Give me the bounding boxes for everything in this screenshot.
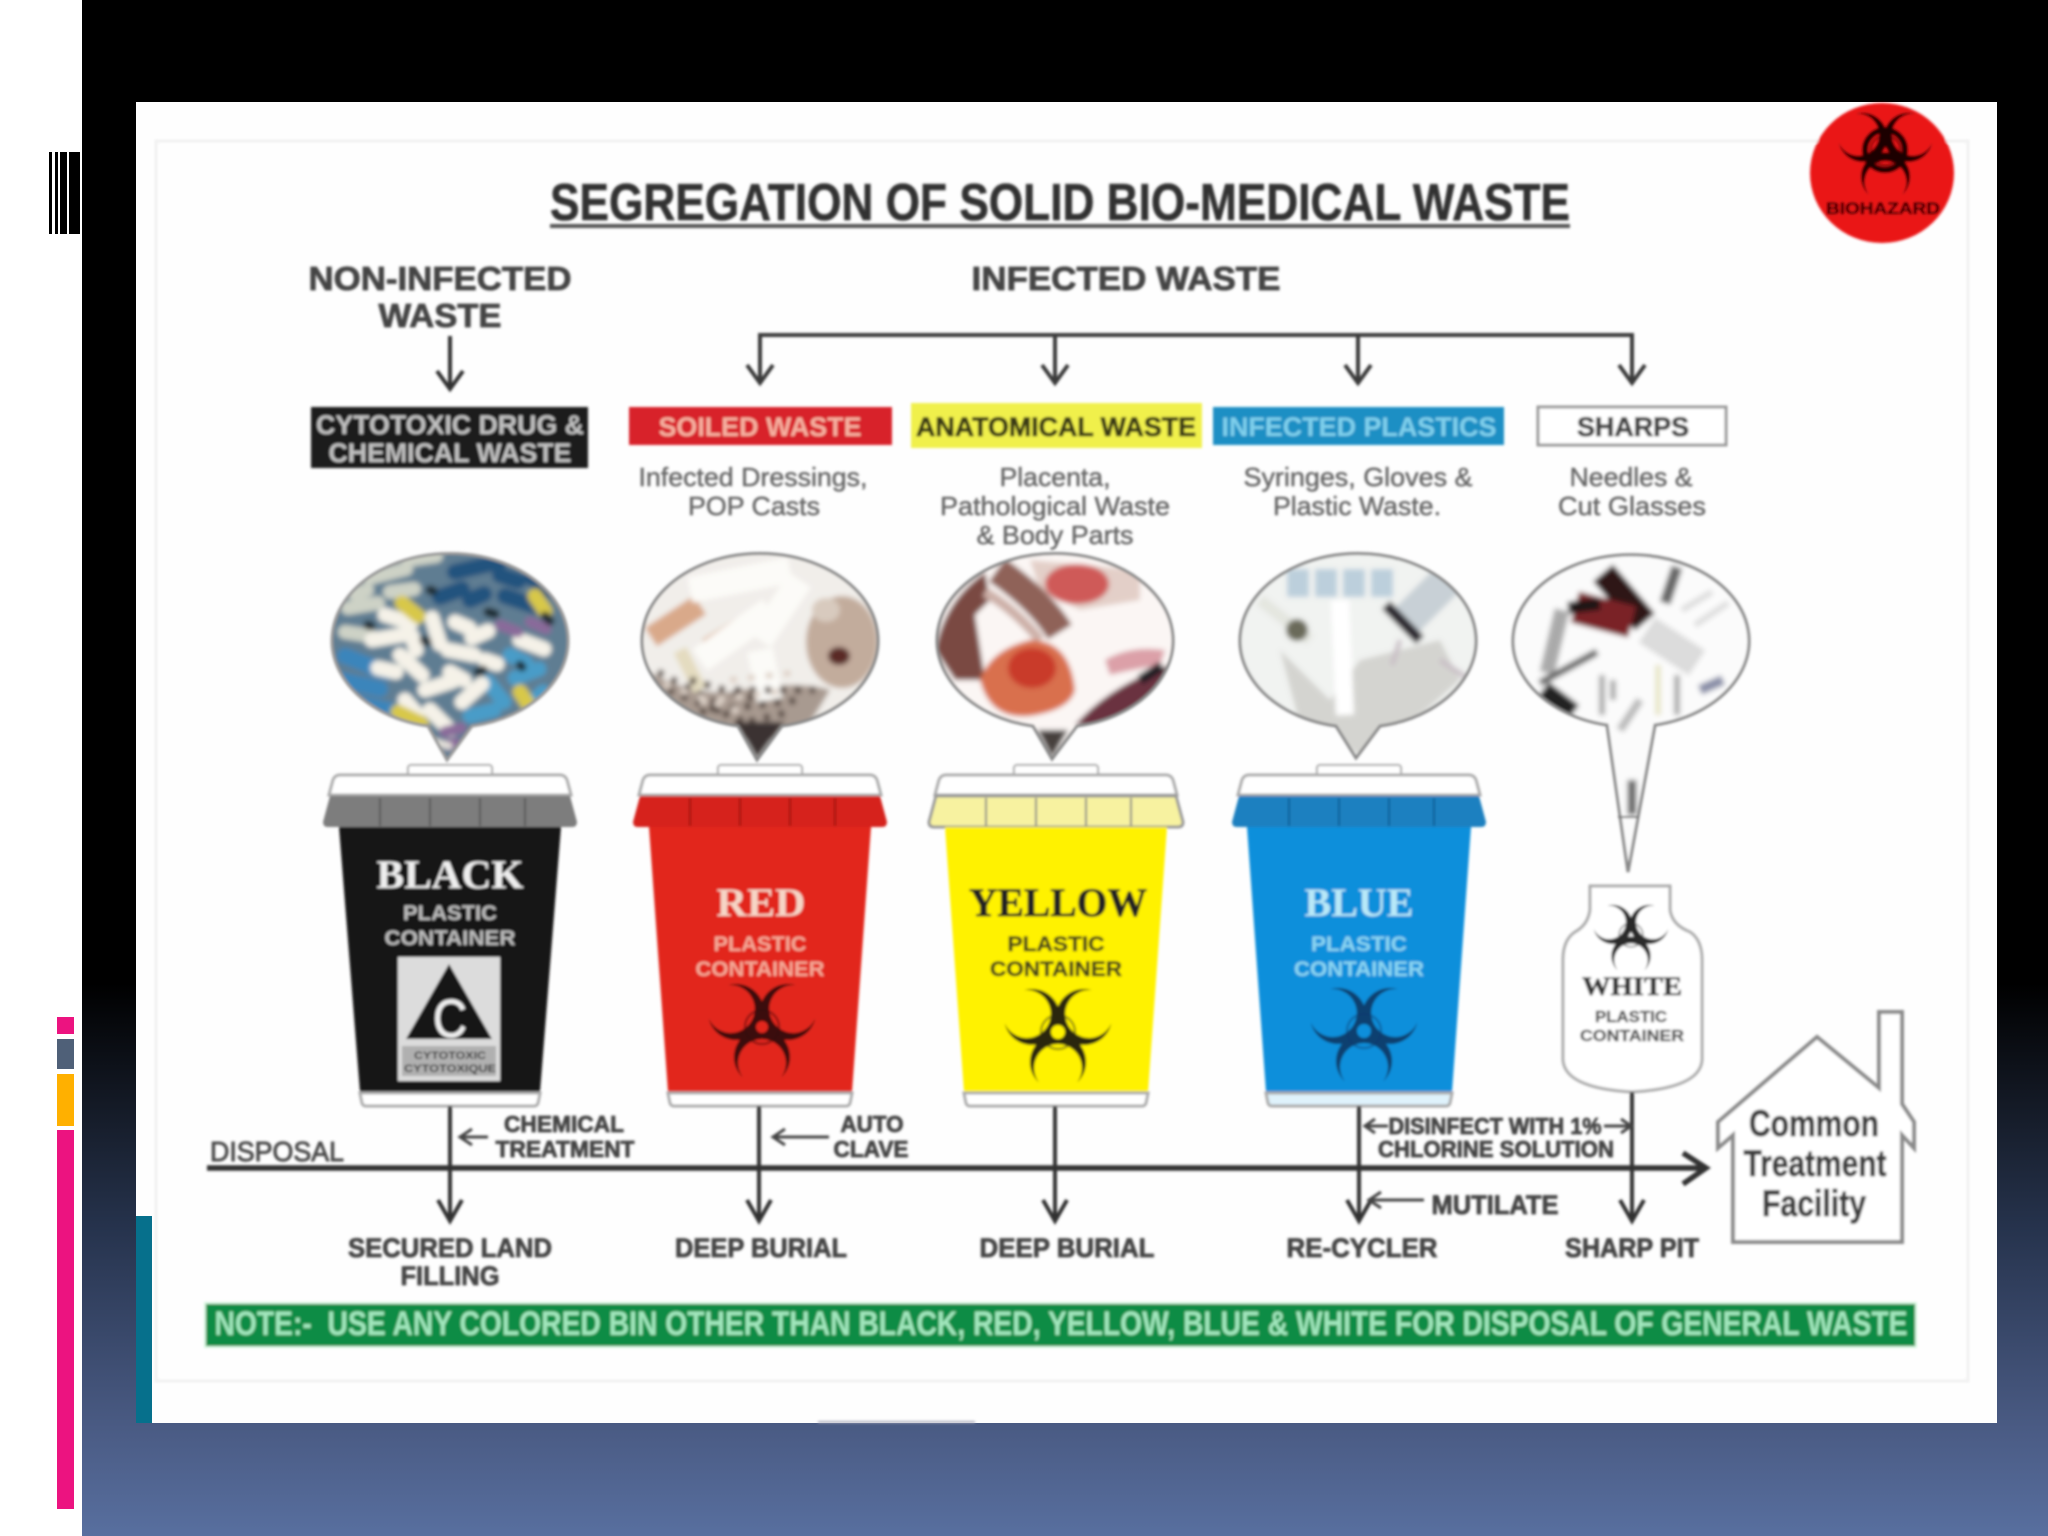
infographic contents xyxy=(156,103,1968,1423)
note: mutilate: MUTILATE xyxy=(1432,1190,1558,1220)
outcome: secured land filling: SECURED LAND xyxy=(348,1233,552,1263)
infographic card xyxy=(136,102,1997,1423)
cytotoxic warning label: C xyxy=(433,989,467,1049)
bin: red: RED xyxy=(716,880,806,925)
common treatment facility house xyxy=(1718,1012,1914,1242)
category label: cytotoxic: CHEMICAL WASTE xyxy=(328,438,572,468)
label: disposal: DISPOSAL xyxy=(210,1136,344,1167)
bin: blue xyxy=(1232,765,1486,1106)
bin: red: CONTAINER xyxy=(696,958,824,981)
cytotoxic warning label: CYTOTOXIC xyxy=(414,1050,486,1062)
note: disinfect: CHLORINE SOLUTION xyxy=(1378,1136,1614,1162)
note: autoclave: AUTO xyxy=(840,1111,904,1137)
description: anatomical waste: & Body Parts xyxy=(976,520,1134,550)
description: infected plastics xyxy=(1244,462,1472,521)
category label: soiled waste: SOILED WASTE xyxy=(658,412,862,442)
biohazard symbol xyxy=(1306,982,1422,1081)
note: autoclave xyxy=(773,1111,908,1162)
photo bubble: body parts xyxy=(930,545,1180,765)
category label: cytotoxic xyxy=(311,407,588,468)
note: disinfect xyxy=(1365,1113,1631,1162)
note: autoclave: CLAVE xyxy=(834,1136,908,1162)
description: soiled waste xyxy=(638,462,868,521)
category label: cytotoxic: CYTOTOXIC DRUG & xyxy=(316,410,584,440)
heading: non-infected waste: NON-INFECTED xyxy=(308,260,572,297)
bin: yellow xyxy=(929,765,1183,1106)
description: sharps xyxy=(1558,462,1706,521)
note: mutilate xyxy=(1369,1190,1558,1220)
bottle: white: PLASTIC xyxy=(1595,1009,1667,1026)
description: soiled waste: Infected Dressings, xyxy=(638,462,868,492)
bin: blue: BLUE xyxy=(1304,880,1414,925)
bin: black xyxy=(323,765,577,1106)
left colour bars xyxy=(57,1017,74,1509)
outcome: secured land filling xyxy=(348,1233,552,1291)
biohazard symbol xyxy=(704,978,820,1077)
disposal axis with arrow xyxy=(207,1153,1706,1184)
bottle: white xyxy=(1563,886,1702,1092)
bin: red: PLASTIC xyxy=(714,933,806,956)
description: soiled waste: POP Casts xyxy=(688,491,820,521)
description: anatomical waste: Pathological Waste xyxy=(940,491,1170,521)
category label: sharps: SHARPS xyxy=(1577,412,1689,442)
description: sharps: Cut Glasses xyxy=(1558,491,1706,521)
biohazard badge xyxy=(1810,103,1954,243)
bin: blue: CONTAINER xyxy=(1294,958,1424,981)
description: anatomical waste: Placenta, xyxy=(1000,462,1110,492)
bin: yellow: PLASTIC xyxy=(1008,933,1104,956)
outcome: deep burial: DEEP BURIAL xyxy=(675,1233,847,1263)
category label: soiled waste xyxy=(629,407,892,445)
category label: anatomical waste xyxy=(911,403,1202,448)
category label: sharps xyxy=(1538,407,1726,445)
decorative barcode stripes xyxy=(49,152,80,234)
bottle: white: WHITE xyxy=(1582,972,1682,1001)
note: chemical treatment: CHEMICAL xyxy=(504,1111,624,1137)
heading: non-infected waste: WASTE xyxy=(378,297,502,334)
heading: infected waste: INFECTED WASTE xyxy=(972,260,1280,297)
description: infected plastics: Syringes, Gloves & xyxy=(1244,462,1472,492)
bin: red xyxy=(633,765,887,1106)
outcome: sharp pit: SHARP PIT xyxy=(1565,1233,1699,1263)
bin: black: BLACK xyxy=(376,852,524,897)
title: SEGREGATION OF SOLID BIO-MEDICAL WASTE xyxy=(550,174,1570,232)
bin: black: CONTAINER xyxy=(384,927,516,950)
biohazard badge: BIOHAZARD xyxy=(1826,199,1940,218)
cytotoxic warning label: CYTOTOXIQUE xyxy=(404,1063,496,1075)
outcome: deep burial: DEEP BURIAL xyxy=(980,1233,1154,1263)
bin: blue: PLASTIC xyxy=(1311,933,1407,956)
teal tab xyxy=(136,1216,152,1423)
photo bubble: dressings xyxy=(630,545,890,765)
photo bubble: sharps xyxy=(1505,545,1760,875)
outcome: secured land filling: FILLING xyxy=(400,1261,500,1291)
description: infected plastics: Plastic Waste. xyxy=(1273,491,1441,521)
common treatment facility house: Common xyxy=(1749,1103,1879,1144)
photo bubble: plastics xyxy=(1235,545,1485,765)
cytotoxic warning label xyxy=(398,957,500,1081)
bottle: white: CONTAINER xyxy=(1580,1028,1684,1045)
bracket arrows from infected waste xyxy=(747,335,1645,383)
photo bubble: pills xyxy=(320,545,580,765)
bin: yellow: CONTAINER xyxy=(990,958,1122,981)
bin: black: PLASTIC xyxy=(403,902,497,925)
category label: anatomical waste: ANATOMICAL WASTE xyxy=(916,412,1196,442)
outcome: re-cycler: RE-CYCLER xyxy=(1286,1233,1438,1263)
arrow: non-infected to cytotoxic xyxy=(437,336,463,389)
note: chemical treatment xyxy=(460,1111,634,1162)
disposal drop arrows xyxy=(438,1092,1644,1221)
common treatment facility house: Facility xyxy=(1762,1183,1866,1224)
description: anatomical waste xyxy=(940,462,1170,550)
category label: infected plastics: INFECTED PLASTICS xyxy=(1222,412,1496,442)
biohazard symbol xyxy=(1591,900,1671,970)
note: disinfect: DISINFECT WITH 1% xyxy=(1388,1113,1602,1139)
heading: non-infected waste xyxy=(308,260,572,334)
description: sharps: Needles & xyxy=(1570,462,1692,492)
bin: yellow: YELLOW xyxy=(969,880,1147,925)
biohazard symbol xyxy=(1000,983,1116,1082)
note: chemical treatment: TREATMENT xyxy=(496,1136,634,1162)
common treatment facility house: Treatment xyxy=(1744,1143,1886,1184)
